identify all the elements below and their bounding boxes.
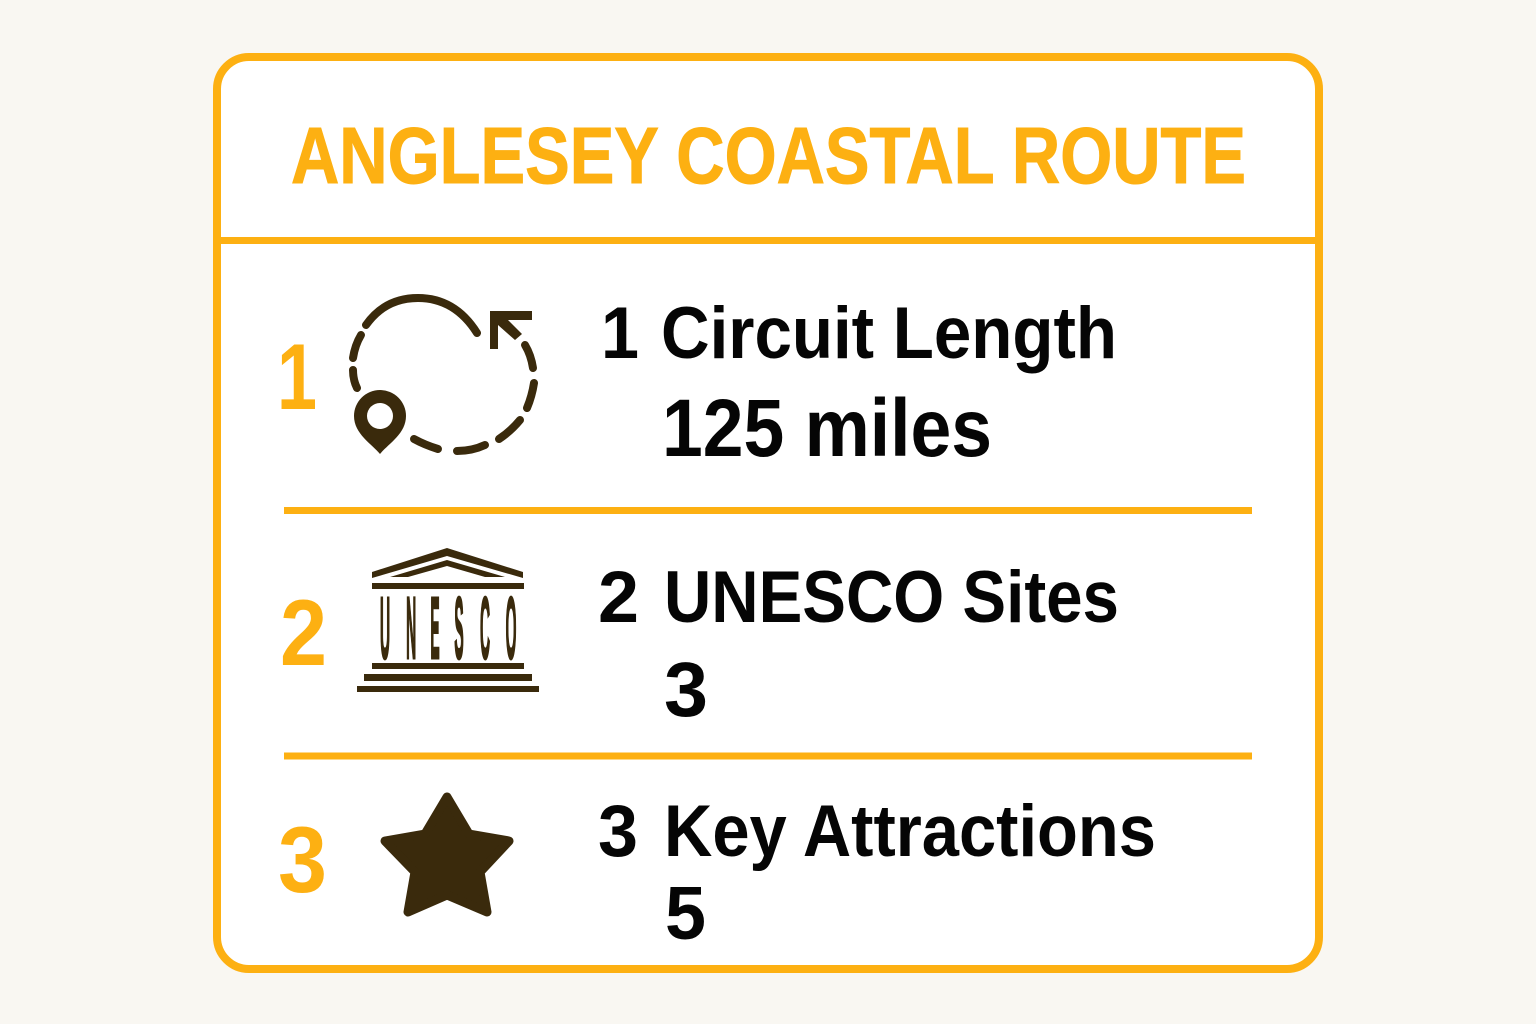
label: circuit length: Circuit Length <box>661 293 1117 374</box>
divider <box>284 752 1252 760</box>
panel: route card <box>217 57 1319 969</box>
label: UNESCO sites: 2 <box>598 557 639 638</box>
value: 125 miles: 125 miles <box>662 383 992 474</box>
value: 5: 5 <box>665 871 706 955</box>
value: 3: 3 <box>664 647 708 733</box>
icon: star <box>385 797 509 912</box>
icon: UNESCO temple: UNESCO <box>380 581 516 678</box>
row number 1: 1 <box>277 324 317 429</box>
icon: dashed circuit with pin and arrow <box>353 298 534 454</box>
label: circuit length: 1 <box>601 293 639 374</box>
label: key attractions: 3 <box>598 791 638 872</box>
label: key attractions: Key Attractions <box>664 791 1156 872</box>
label: UNESCO sites: UNESCO Sites <box>664 557 1119 638</box>
row number 3: 3 <box>278 807 327 912</box>
title: ANGLESEY COASTAL ROUTE <box>291 111 1246 200</box>
row number 2: 2 <box>280 580 327 685</box>
row 2: UNESCO sites <box>280 548 1119 733</box>
row 3: key attractions <box>278 791 1156 955</box>
icon: UNESCO temple <box>357 548 539 692</box>
divider <box>284 507 1252 514</box>
row 1: circuit length <box>277 293 1117 474</box>
